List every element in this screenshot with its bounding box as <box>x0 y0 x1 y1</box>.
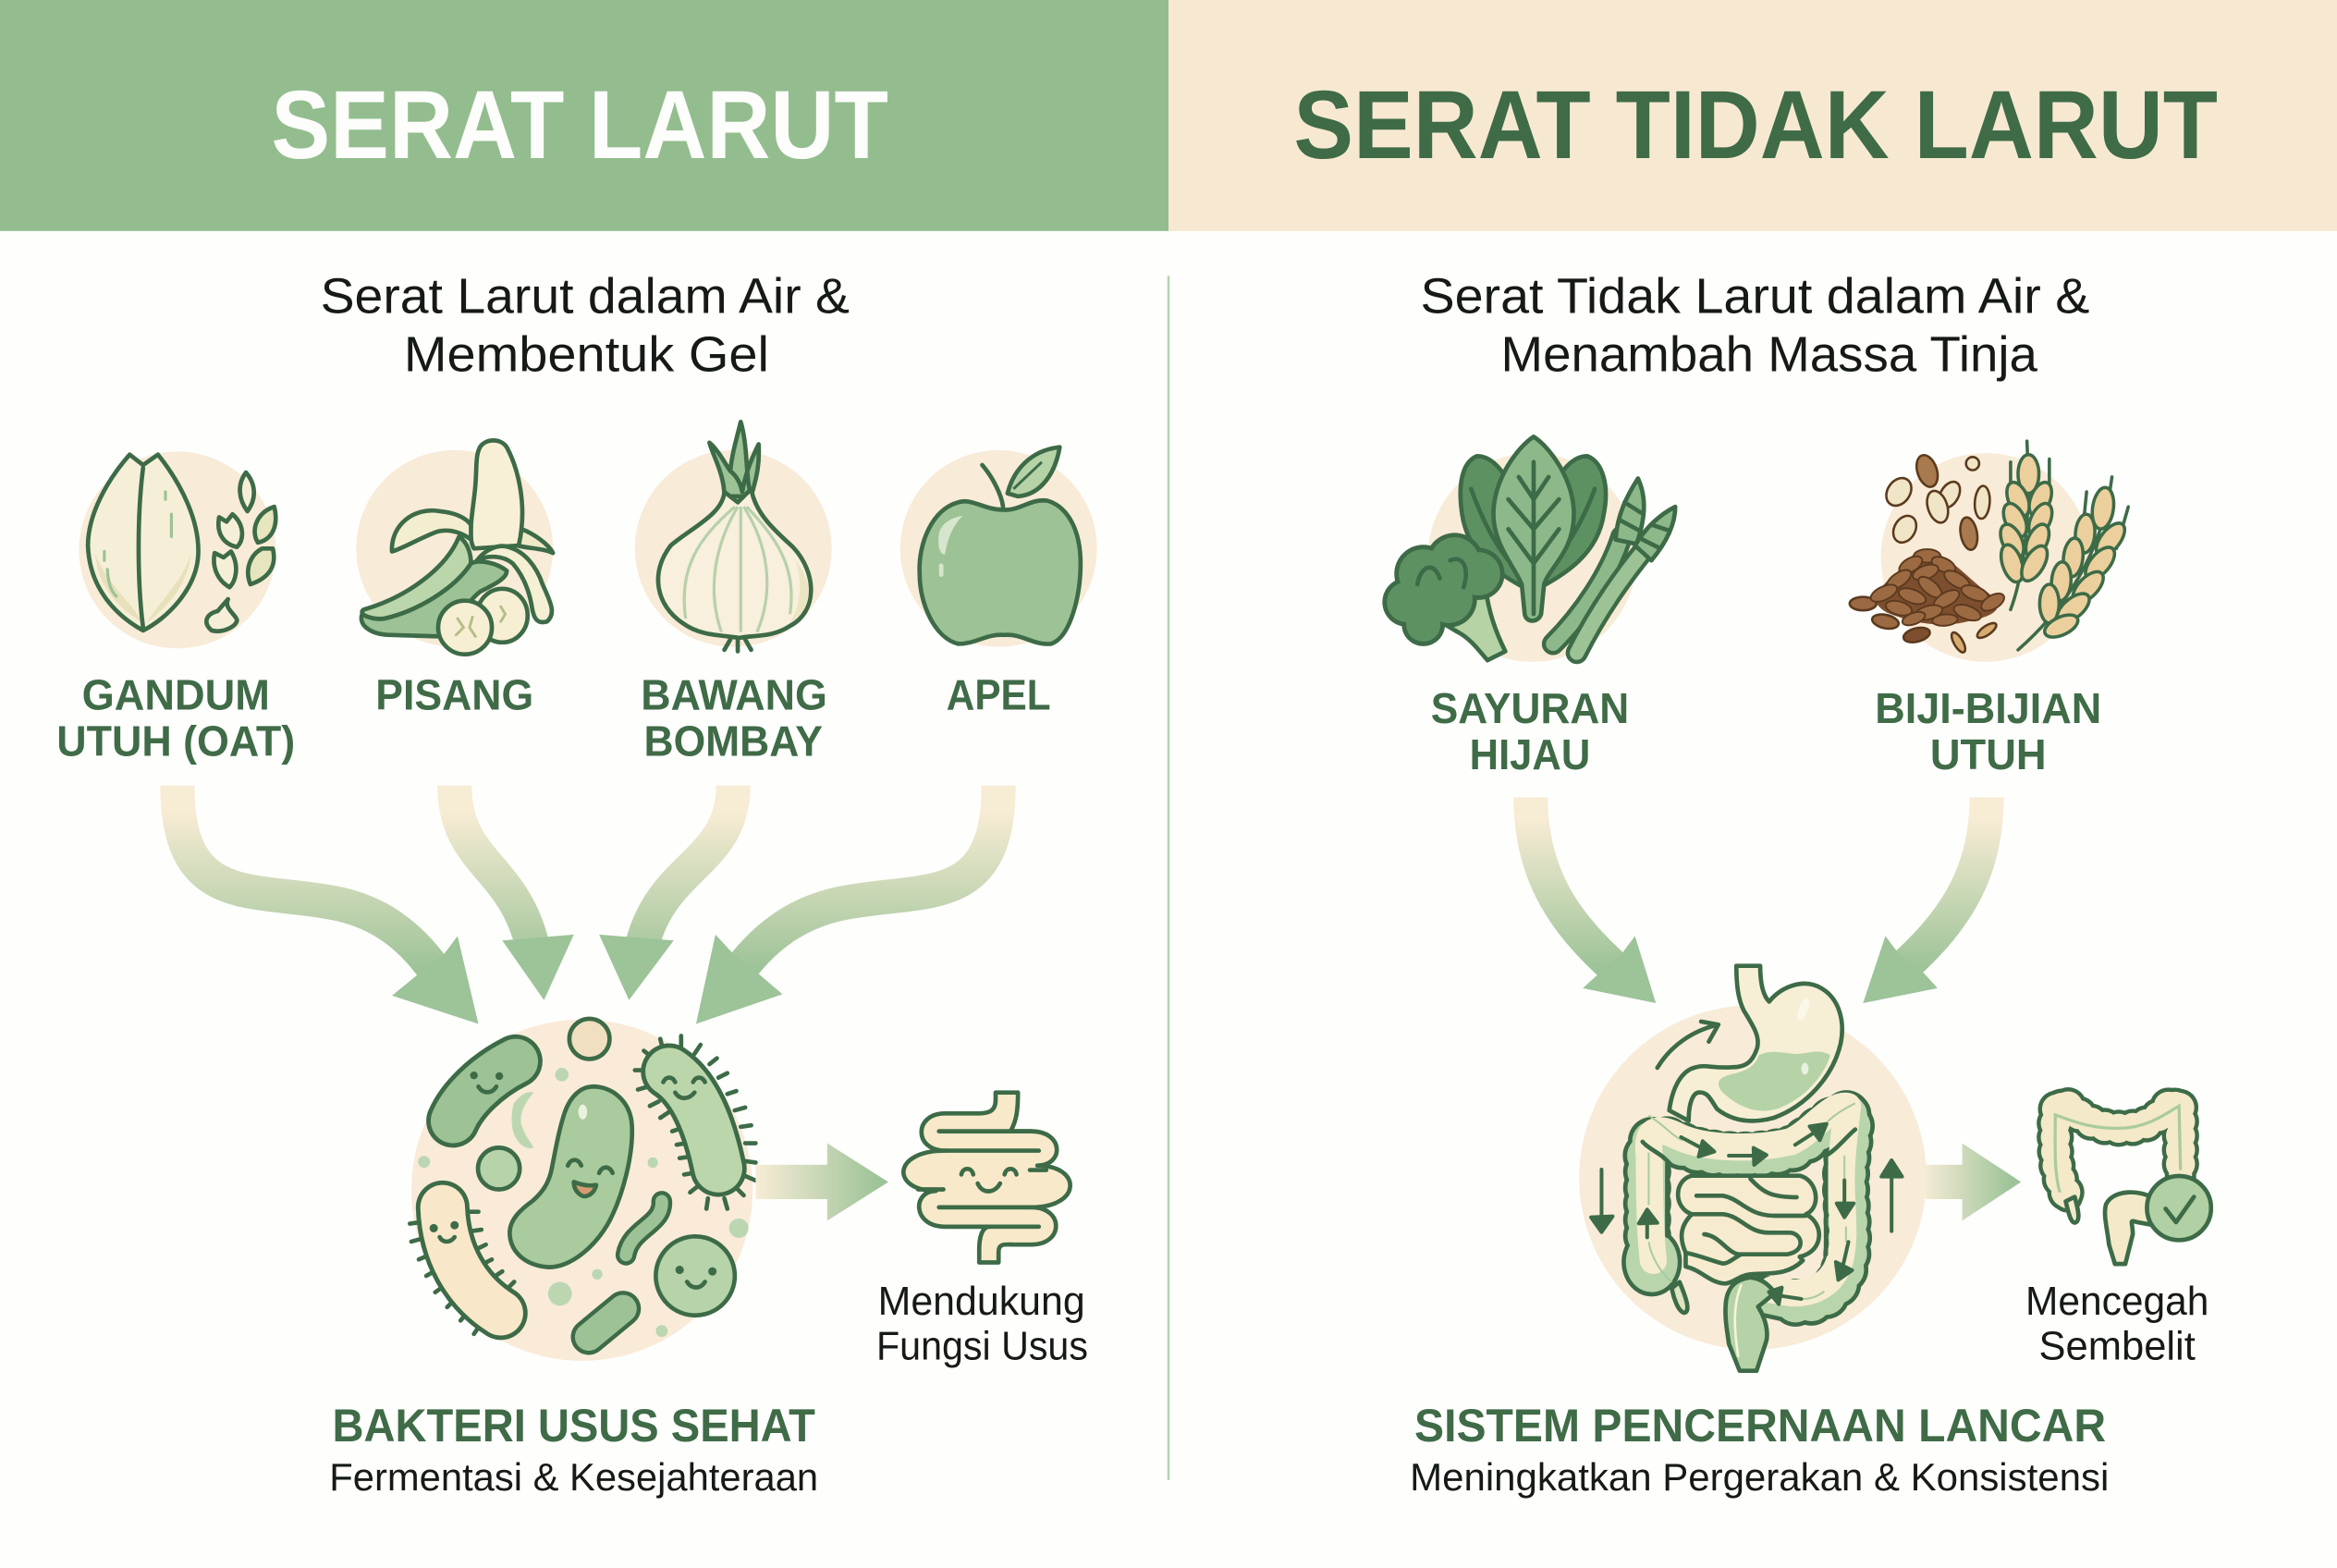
caption: mendukung fungsi usus: Fungsi Usus <box>876 1324 1088 1368</box>
text: fermentasi dan kesejahteraan: Fermentasi & Kesejahteraan <box>329 1455 818 1499</box>
label: sayuran hijau: SAYURAN <box>1431 684 1629 732</box>
label: sayuran hijau <box>1431 684 1629 778</box>
icon: sayuran hijau <box>1382 436 1675 662</box>
title: serat larut: SERAT LARUT <box>271 71 888 179</box>
caption: mencegah sembelit: Mencegah <box>2025 1280 2209 1324</box>
caption: mencegah sembelit <box>2025 1280 2209 1368</box>
label: biji-bijian utuh: BIJI-BIJIAN <box>1875 684 2101 732</box>
text: meningkatkan pergerakan dan konsistensi: Meningkatkan Pergerakan & Konsistensi <box>1410 1455 2109 1499</box>
icon: biji-bijian utuh <box>1850 441 2130 662</box>
panel: header serat tidak larut <box>1168 0 2337 231</box>
sub-element: asparagus <box>1553 479 1675 653</box>
icon: apel <box>900 447 1097 647</box>
arrow: bakteri ke usus <box>755 1144 888 1220</box>
sub-element: gandum 2 <box>2018 477 2130 650</box>
subtitle: left <box>321 269 850 382</box>
label: gandum utuh: UTUH (OAT) <box>56 717 295 765</box>
label: gandum utuh: GANDUM <box>82 670 270 718</box>
caption: mencegah sembelit: Sembelit <box>2039 1324 2196 1368</box>
sub-element: tumpukan biji <box>1868 549 2007 628</box>
heading: bakteri usus sehat: BAKTERI USUS SEHAT <box>333 1400 815 1452</box>
icon: bawang bombay <box>635 422 832 652</box>
icon: pisang <box>356 440 553 655</box>
arrow: pencernaan ke usus besar <box>1926 1144 2021 1220</box>
icon: usus tersenyum <box>903 1093 1071 1263</box>
sub-element: lambung <box>1670 966 1842 1121</box>
label: biji-bijian utuh: UTUH <box>1930 730 2047 778</box>
label: bawang bombay <box>641 670 827 765</box>
sub-element: usus halus dan rektum <box>1671 1176 1819 1371</box>
arrow: bawang ke bakteri <box>599 786 733 1000</box>
arrow: apel ke bakteri <box>696 786 998 1024</box>
arrow: gandum ke bakteri <box>177 786 479 1024</box>
label: sayuran hijau: HIJAU <box>1470 730 1590 778</box>
caption: mendukung fungsi usus <box>876 1280 1088 1368</box>
subtitle: right <box>1420 269 2089 382</box>
sub-element: gandum 1 <box>1996 441 2057 609</box>
caption: mendukung fungsi usus: Mendukung <box>878 1280 1085 1324</box>
subtitle: left: Serat Larut dalam Air & <box>321 269 850 325</box>
sub-element: brokoli <box>1382 533 1505 660</box>
title: serat tidak larut: SERAT TIDAK LARUT <box>1293 71 2218 179</box>
arrow: biji-bijian ke pencernaan <box>1863 798 1987 1003</box>
icon: bakteri usus <box>410 1019 755 1361</box>
label: biji-bijian utuh <box>1875 684 2101 778</box>
icon: sistem pencernaan <box>1579 966 1927 1371</box>
label: apel: APEL <box>947 670 1051 718</box>
subtitle: right: Serat Tidak Larut dalam Air & <box>1420 269 2089 325</box>
panel: header serat larut <box>0 0 1168 231</box>
heading: sistem pencernaan lancar: SISTEM PENCERNAAN LANCAR <box>1414 1400 2106 1452</box>
label: bawang bombay: BAWANG <box>641 670 827 718</box>
label: gandum utuh <box>56 670 295 765</box>
sub-element: panah gerakan <box>1591 1022 1903 1305</box>
subtitle: right: Menambah Massa Tinja <box>1501 326 2038 382</box>
sub-element: usus besar <box>1621 1103 1855 1303</box>
arrow: pisang ke bakteri <box>455 786 574 1000</box>
subtitle: left: Membentuk Gel <box>404 326 769 382</box>
icon: oat <box>79 451 275 648</box>
label: bawang bombay: BOMBAY <box>643 717 823 765</box>
label: pisang: PISANG <box>375 670 533 718</box>
icon: usus besar sehat <box>2055 1103 2211 1264</box>
arrow: sayuran ke pencernaan <box>1531 798 1656 1003</box>
